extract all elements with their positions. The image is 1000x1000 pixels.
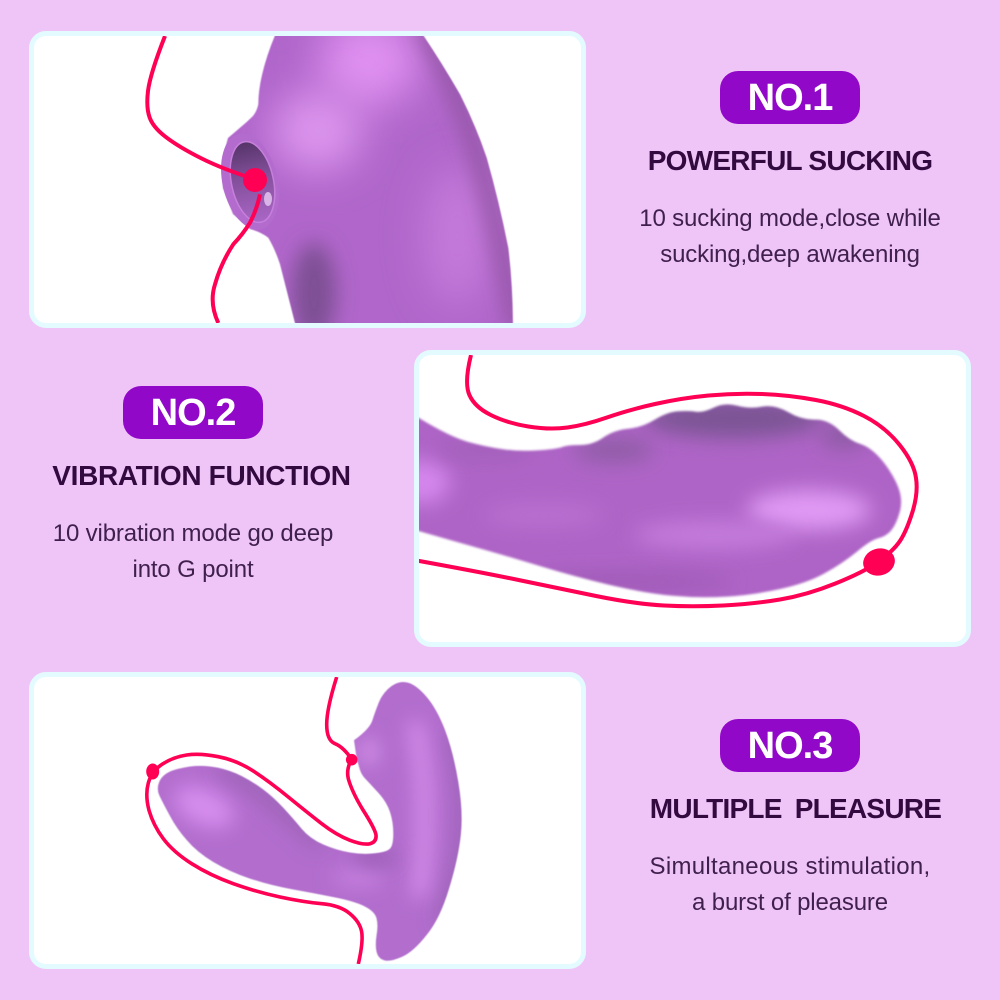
product close-up: suction head [221,36,514,323]
pink dot [860,545,898,579]
description: sucking,deep awakening [660,241,920,268]
nozzle opening [223,138,282,226]
description: 10 vibration mode go deep [53,520,333,547]
description [639,205,941,268]
description: a burst of pleasure [692,889,888,916]
badge: NO.2: NO.2 [151,392,235,434]
pink line: stimulation path [414,355,917,606]
text block: No.2 vibration function [52,386,351,583]
nozzle rim [212,128,288,235]
product close-up: ridged shaft [419,402,903,599]
panel: multiple pleasure product image [29,672,586,969]
description [650,853,930,916]
text block: No.1 powerful sucking [639,71,941,268]
badge: NO.1 [720,71,860,124]
description: Simultaneous stimulation, [650,853,930,880]
badge: NO.2 [123,386,263,439]
pink line: stimulation paths [147,677,376,964]
full product silhouette [157,681,462,962]
pink dot [243,168,267,192]
heading: MULTIPLE PLEASURE [650,793,941,824]
badge: NO.1: NO.1 [748,77,832,119]
description: into G point [133,556,253,583]
pink dot: top [346,754,358,766]
heading: VIBRATION FUNCTION [52,460,351,491]
badge: NO.3: NO.3 [748,725,832,767]
heading: POWERFUL SUCKING [648,145,932,176]
panel: powerful sucking product image [29,31,586,328]
description: 10 sucking mode,close while [639,205,941,232]
description [53,520,333,583]
badge: NO.3 [720,719,860,772]
text block: No.3 multiple pleasure [650,719,941,916]
pink line: stimulation path [147,36,260,323]
pink dot: left [146,764,159,780]
panel: vibration function product image [414,350,971,647]
